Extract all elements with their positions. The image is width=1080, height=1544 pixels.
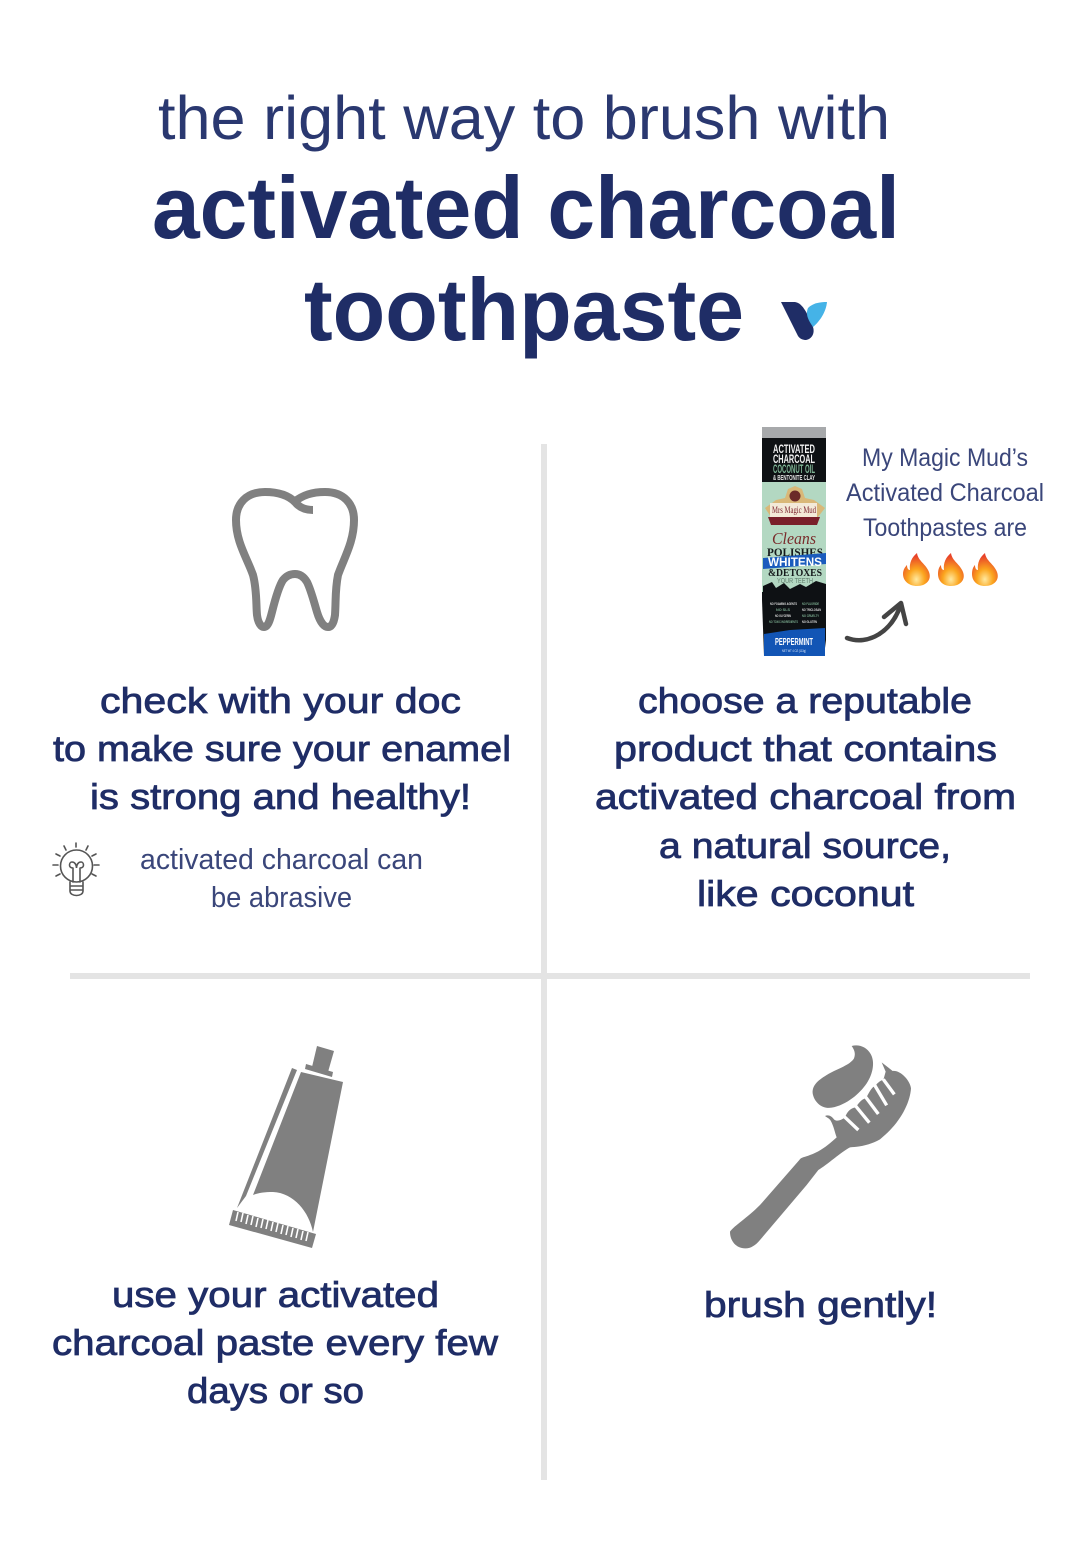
heading: check with your doc: check with your doc — [100, 680, 461, 721]
heading: check with your doc: is strong and healthy! — [90, 776, 471, 817]
product: toothpaste box: ACTIVATED — [773, 442, 815, 456]
product: toothpaste box: NET WT 4 OZ (113g) — [782, 648, 806, 653]
heading: choose a reputable product — [595, 680, 1016, 914]
heading: check with your doc — [53, 680, 511, 817]
arrow: pointing to flames — [847, 603, 906, 640]
heading: use your paste: days or so — [187, 1370, 364, 1411]
icon: light bulb — [53, 843, 99, 896]
icon: toothpaste tube — [229, 1046, 343, 1248]
panel: brush gently — [704, 1045, 937, 1325]
caption: my magic mud — [846, 444, 1044, 542]
icon: three flames — [903, 553, 998, 586]
heading: choose a reputable product: a natural source, — [659, 825, 951, 866]
product: toothpaste box: Mrs Magic Mud — [772, 505, 816, 515]
product: toothpaste box: NO GLUTEN — [802, 619, 817, 624]
heading: brush gently: brush gently! — [704, 1284, 937, 1325]
product: toothpaste box: NO CRUELTY — [802, 613, 819, 618]
panel: use your paste — [52, 1046, 499, 1411]
product: toothpaste box: POLISHES — [767, 545, 823, 559]
product: toothpaste box: Cleans — [772, 529, 816, 548]
product: toothpaste box: NO TRICLOSAN — [802, 607, 821, 612]
product: toothpaste box: WHITENS — [768, 555, 822, 569]
product: toothpaste box: CHARCOAL — [773, 452, 815, 466]
product: toothpaste box: NO FLUORIDE — [802, 601, 819, 606]
product: toothpaste box: COCONUT OIL — [773, 462, 815, 476]
title: the right way to brush with — [158, 84, 890, 152]
product: toothpaste box: &DETOXES — [768, 567, 822, 579]
icon: brand logo — [781, 302, 827, 340]
heading: choose a reputable product: like coconut — [697, 873, 914, 914]
product: toothpaste box: NO FOAMING AGENTS — [770, 601, 797, 606]
heading: use your paste: charcoal paste every few — [52, 1322, 499, 1363]
icon: tooth — [236, 492, 354, 627]
product: toothpaste box: NO TOXIC INGREDIENTS — [769, 619, 798, 624]
panel: choose a reputable product — [595, 427, 1044, 914]
caption: my magic mud: Activated Charcoal — [846, 479, 1044, 507]
panel: check with your doc — [53, 492, 511, 914]
product: toothpaste box: YOUR TEETH — [777, 578, 813, 585]
product: toothpaste box: PEPPERMINT — [775, 637, 813, 648]
caption: my magic mud: My Magic Mud’s — [862, 444, 1028, 472]
product: toothpaste box: & BENTONITE CLAY — [773, 475, 815, 482]
heading: choose a reputable product: product that contains — [614, 728, 997, 769]
heading: choose a reputable product: choose a reputable — [638, 680, 972, 721]
note: abrasive warning — [140, 844, 423, 914]
title: toothpaste — [304, 260, 744, 359]
caption: my magic mud: Toothpastes are — [863, 514, 1027, 542]
heading: use your paste: use your activated — [112, 1274, 439, 1315]
icon: toothbrush — [730, 1045, 911, 1248]
title: activated charcoal — [152, 158, 900, 257]
product: toothpaste box — [762, 427, 826, 656]
divider lines — [70, 444, 1030, 1480]
title — [152, 84, 900, 359]
heading: choose a reputable product: activated charcoal from — [595, 776, 1016, 817]
note: abrasive warning: be abrasive — [211, 882, 352, 914]
note: abrasive warning: activated charcoal can — [140, 844, 423, 876]
product: toothpaste box: NO GLYCERIN — [775, 613, 791, 618]
product: toothpaste box: NO SLS — [776, 607, 790, 612]
heading: use your paste — [52, 1274, 499, 1411]
heading: check with your doc: to make sure your enamel — [53, 728, 511, 769]
